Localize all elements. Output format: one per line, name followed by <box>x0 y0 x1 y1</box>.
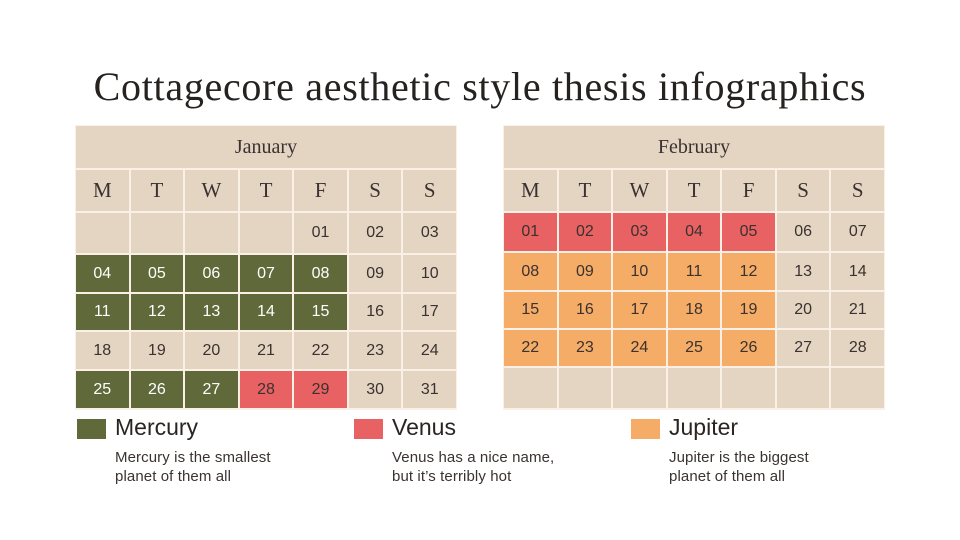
panel: January calendar: 04 <box>93 264 111 282</box>
panel: February calendar: 16 <box>576 301 594 318</box>
panel: February calendar: 14 <box>849 262 867 280</box>
panel: February calendar: 11 <box>686 262 702 280</box>
legend: Mercury: Mercury is the smallest <box>115 449 271 466</box>
panel: February calendar: 15 <box>521 301 539 318</box>
panel: February calendar: 25 <box>685 339 703 356</box>
panel: January calendar: 20 <box>203 342 220 358</box>
panel: January calendar: W <box>202 178 221 202</box>
panel: January calendar: 27 <box>203 380 220 398</box>
panel: January calendar: 25 <box>93 380 111 398</box>
panel: February calendar: T <box>578 178 591 202</box>
legend: Mercury <box>77 414 271 485</box>
panel: February calendar: 07 <box>849 223 867 240</box>
panel: January calendar: 29 <box>312 380 329 398</box>
panel: January calendar: 16 <box>366 303 384 320</box>
panel: February calendar: S <box>797 178 809 202</box>
panel: January calendar: 14 <box>257 303 275 320</box>
panel: January calendar: 01 <box>312 224 329 241</box>
panel: January calendar: 21 <box>257 342 275 358</box>
panel: February calendar <box>503 125 885 410</box>
panel: January calendar: 30 <box>366 380 384 398</box>
panel: January calendar: 17 <box>421 303 439 320</box>
panel: February calendar: M <box>521 178 540 202</box>
panel: January calendar: 31 <box>421 380 439 398</box>
panel: January calendar: T <box>260 178 272 202</box>
panel: January calendar: 03 <box>421 224 439 241</box>
legend: Venus: but it’s terribly hot <box>392 468 511 485</box>
panel: January calendar: 13 <box>203 303 220 320</box>
panel: January calendar: 19 <box>148 342 166 358</box>
panel: February calendar: 17 <box>631 301 648 318</box>
panel: January calendar: 22 <box>312 342 329 358</box>
panel: January calendar: M <box>93 178 112 202</box>
legend: Jupiter: planet of them all <box>669 468 785 485</box>
panel: February calendar: 08 <box>521 262 539 280</box>
panel: February calendar: W <box>630 178 649 202</box>
legend: Venus: Venus <box>392 414 456 440</box>
panel: January calendar: 10 <box>421 264 439 282</box>
panel: January calendar: 18 <box>93 342 111 358</box>
legend: Mercury: planet of them all <box>115 468 231 485</box>
panel: February calendar: 12 <box>740 262 757 280</box>
panel: January calendar: January <box>235 136 297 158</box>
panel: February calendar: 05 <box>740 223 757 240</box>
panel: January calendar: S <box>424 178 436 202</box>
panel: February calendar: 04 <box>685 223 703 240</box>
panel: February calendar: 18 <box>685 301 703 318</box>
panel: January calendar: 15 <box>312 303 329 320</box>
panel: February calendar: 20 <box>794 301 812 318</box>
panel: February calendar: 28 <box>849 339 867 356</box>
panel: February calendar: 23 <box>576 339 594 356</box>
legend: Jupiter <box>631 414 809 485</box>
panel: February calendar: F <box>743 178 754 202</box>
panel: February calendar: S <box>852 178 864 202</box>
panel: February calendar: 01 <box>521 223 539 240</box>
panel: February calendar: 26 <box>740 339 757 356</box>
title: Cottagecore aesthetic style thesis infographics <box>94 64 866 109</box>
panel: February calendar: T <box>688 178 700 202</box>
panel: January calendar: 11 <box>94 303 111 320</box>
panel: January calendar: 23 <box>366 342 384 358</box>
legend: Venus <box>354 414 554 485</box>
panel: January calendar: 06 <box>203 264 220 282</box>
panel: January calendar: 28 <box>257 380 275 398</box>
panel: February calendar: 06 <box>794 223 812 240</box>
legend: Venus: Venus has a nice name, <box>392 449 554 466</box>
panel: January calendar <box>75 125 457 410</box>
legend: Jupiter: Jupiter <box>669 414 738 440</box>
panel: January calendar: 12 <box>148 303 166 320</box>
panel: February calendar: 22 <box>521 339 539 356</box>
panel: January calendar: F <box>315 178 326 202</box>
panel: January calendar: 02 <box>366 224 384 241</box>
panel: February calendar: 21 <box>849 301 867 318</box>
legend: Mercury: Mercury <box>115 414 198 440</box>
panel: January calendar: 26 <box>148 380 166 398</box>
legend: Jupiter: Jupiter is the biggest <box>669 449 809 466</box>
panel: January calendar: 09 <box>366 264 384 282</box>
panel: February calendar: 09 <box>576 262 594 280</box>
panel: January calendar: 07 <box>257 264 275 282</box>
panel: February calendar: 02 <box>576 223 594 240</box>
panel: February calendar: 13 <box>794 262 812 280</box>
panel: February calendar: 19 <box>740 301 757 318</box>
panel: January calendar: 24 <box>421 342 439 358</box>
panel: February calendar: 24 <box>631 339 648 356</box>
panel: February calendar: 03 <box>631 223 648 240</box>
panel: February calendar: 27 <box>794 339 812 356</box>
panel: January calendar: 08 <box>312 264 329 282</box>
panel: February calendar: 10 <box>631 262 648 280</box>
panel: January calendar: 05 <box>148 264 166 282</box>
panel: February calendar: February <box>658 136 730 158</box>
panel: January calendar: T <box>150 178 163 202</box>
panel: January calendar: S <box>369 178 381 202</box>
